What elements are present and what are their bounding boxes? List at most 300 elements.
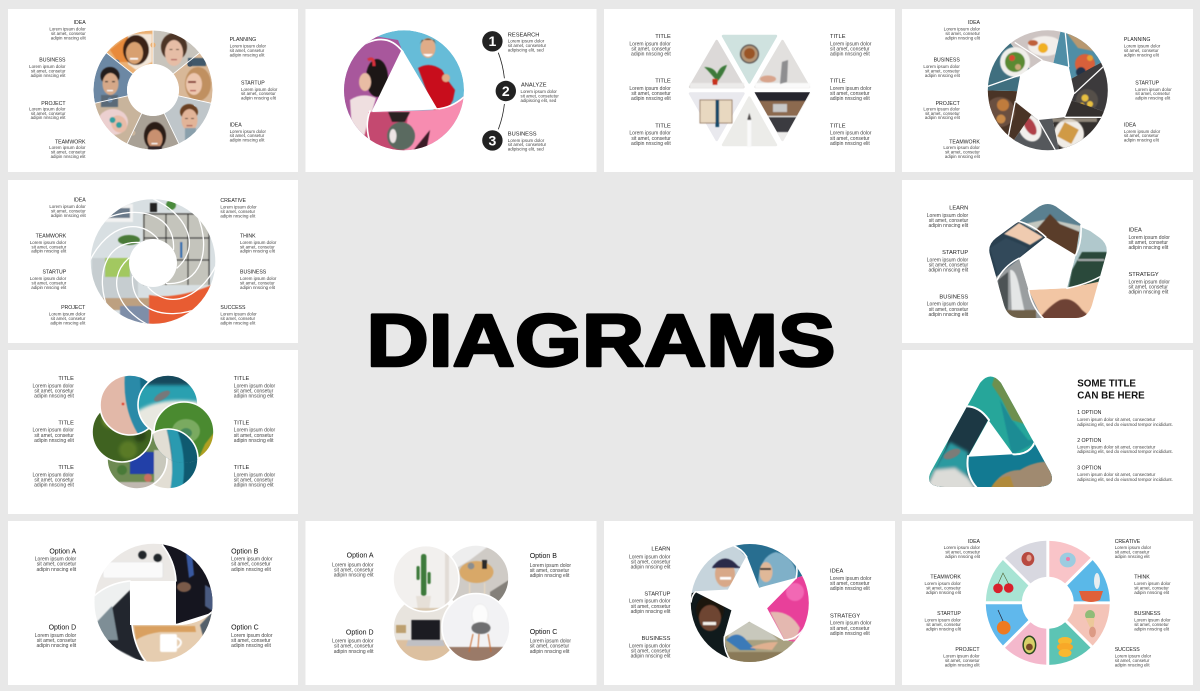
label: TEAMWORK: sit amet, consetur xyxy=(51,150,86,155)
label: TITLE middle right: sit amet, consetur xyxy=(830,91,870,97)
inner opening xyxy=(129,239,177,287)
label: PROJECT: Lorem ipsum dolor xyxy=(923,106,960,111)
title: DIAGRAMS xyxy=(366,299,836,382)
label: IDEA: Lorem ipsum dolor xyxy=(1128,235,1170,241)
label: STRATEGY: STRATEGY xyxy=(830,613,860,619)
label: Option C: Option C xyxy=(530,629,557,636)
label: TITLE bottom right: TITLE xyxy=(234,465,249,471)
panel background xyxy=(604,9,895,172)
label: IDEA: Lorem ipsum dolor xyxy=(944,545,981,550)
room photo xyxy=(90,198,216,326)
blade separators xyxy=(997,221,1103,320)
label: THINK: Lorem ipsum dolor xyxy=(240,240,277,245)
label: CREATIVE: Lorem ipsum dolor xyxy=(1115,545,1152,550)
segment: ice cream cone xyxy=(1067,604,1110,646)
blade: pan with vegetables xyxy=(1071,62,1108,112)
label: Option D: Option D xyxy=(49,625,76,632)
panel background xyxy=(306,9,596,172)
label: CREATIVE: CREATIVE xyxy=(220,198,246,204)
label: Option A: adipin nnscing elit xyxy=(334,572,374,578)
swirl photo circle xyxy=(90,199,216,324)
label: Option B: sit amet, consetur xyxy=(231,562,271,568)
label: PROJECT: Lorem ipsum dolor xyxy=(29,106,66,111)
panel: four interior circles xyxy=(306,521,596,685)
panel background xyxy=(902,180,1193,343)
step 1 badge: 1 xyxy=(489,33,497,49)
label: TEAMWORK: Lorem ipsum dolor xyxy=(49,145,86,150)
label: Option B: Lorem ipsum dolor xyxy=(231,557,273,563)
label: TEAMWORK: sit amet, consetur xyxy=(32,244,67,249)
blade: dusk lake xyxy=(984,222,1046,277)
label: SUCCESS: sit amet, consetur xyxy=(220,316,256,321)
label: IDEA: sit amet, consetur xyxy=(945,550,981,555)
step 1 badge xyxy=(482,31,503,52)
label: Option D: adipin nnscing elit xyxy=(36,643,77,649)
label: PLANNING: sit amet, consetur xyxy=(230,48,265,53)
label: BUSINESS: sit amet, consetur xyxy=(929,307,969,313)
label: ANALYZE: ANALYZE xyxy=(521,83,547,89)
quadrant: dark suit xyxy=(161,540,214,624)
circle photo with square opening xyxy=(90,540,214,670)
label: STARTUP: STARTUP xyxy=(42,270,67,276)
label: IDEA right: adipin nnscing elit xyxy=(1124,138,1160,143)
label: LEARN: sit amet, consetur xyxy=(631,559,671,565)
label: BUSINESS: adipiscing elit, sed xyxy=(508,147,544,152)
panel: aerial pinwheel xyxy=(8,350,298,514)
circle: cactus xyxy=(390,544,462,614)
label: BUSINESS: BUSINESS xyxy=(508,132,537,138)
blade: coastal road xyxy=(1067,227,1107,288)
label: TITLE bottom right: adipin nnscing elit xyxy=(830,141,870,147)
label: TITLE top right: sit amet, consetur xyxy=(234,388,274,394)
label: IDEA: IDEA xyxy=(830,569,843,575)
four overlapping circles xyxy=(390,543,512,666)
donut: seven portrait puzzle pieces xyxy=(94,30,212,150)
label: STRATEGY: sit amet, consetur xyxy=(1128,284,1168,290)
piece: man left xyxy=(94,53,132,108)
segment separators xyxy=(960,406,1037,489)
label: IDEA: sit amet, consetur xyxy=(51,31,86,36)
label: PROJECT: sit amet, consetur xyxy=(925,111,960,116)
label: TEAMWORK: TEAMWORK xyxy=(930,575,961,581)
puzzle tabs xyxy=(107,42,199,136)
panel background xyxy=(8,180,298,343)
label: IDEA: IDEA xyxy=(968,539,981,545)
petal: green park xyxy=(152,400,216,464)
label: TITLE top right: Lorem ipsum dolor xyxy=(830,42,872,48)
label: IDEA: IDEA xyxy=(968,20,981,26)
label: LEARN: LEARN xyxy=(651,547,670,553)
label: THINK: adipin nnscing elit xyxy=(1134,590,1170,595)
quadrant separators xyxy=(93,543,214,664)
label: TITLE middle right: TITLE xyxy=(234,420,249,426)
label: TITLE middle left: adipin nnscing elit xyxy=(34,438,75,444)
label: LEARN: LEARN xyxy=(949,205,968,211)
heading: SOME TITLE xyxy=(1077,378,1136,390)
option 1: 1 OPTION xyxy=(1077,410,1102,416)
label: TITLE top left: Lorem ipsum dolor xyxy=(32,383,74,389)
label: TEAMWORK: adipin nnscing elit xyxy=(31,249,67,254)
label: TEAMWORK: Lorem ipsum dolor xyxy=(943,145,980,150)
label: PROJECT: Lorem ipsum dolor xyxy=(49,312,86,316)
label: RESEARCH: sit amet, consetetur xyxy=(508,43,547,48)
petal: forest xyxy=(90,400,154,464)
label: IDEA right: IDEA xyxy=(1124,122,1137,128)
label: LEARN: adipin nnscing elit xyxy=(928,223,969,229)
label: STARTUP: Lorem ipsum dolor xyxy=(925,618,961,622)
piece: man lower right xyxy=(164,96,211,144)
petal: boat on shore xyxy=(136,373,200,437)
step 2 badge xyxy=(496,81,516,101)
segment: plate with lollipop xyxy=(1049,541,1091,583)
label: THINK: sit amet, consetur xyxy=(240,244,275,249)
wheel of eight segments xyxy=(974,529,1122,677)
quadrant: coffee mug on wood xyxy=(132,610,214,670)
label: THINK: THINK xyxy=(240,233,256,239)
panel: office aperture A-D xyxy=(8,521,298,685)
segment: dark sea and turtle rock xyxy=(925,406,988,490)
label: STARTUP: STARTUP xyxy=(241,80,265,86)
label: RESEARCH: Lorem ipsum dolor xyxy=(508,38,545,44)
label: CREATIVE: CREATIVE xyxy=(1115,539,1141,545)
blade: woman in blue hood xyxy=(730,540,815,603)
panel: three-step triangle aperture xyxy=(306,9,596,172)
label: BUSINESS: Lorem ipsum dolor xyxy=(29,64,66,69)
label: Option A: sit amet, consetur xyxy=(334,567,374,573)
panel: hexagon of triangles xyxy=(604,9,895,172)
label: TITLE top left: Lorem ipsum dolor xyxy=(629,42,671,48)
label: IDEA: adipin nnscing elit xyxy=(945,35,981,40)
blade: waterfall xyxy=(996,258,1044,322)
label: STRATEGY: Lorem ipsum dolor xyxy=(1128,279,1170,285)
option 3: adipiscing elit, sed do eiusmod tempor incididunt. xyxy=(1077,477,1173,482)
white triangle centre xyxy=(968,420,1013,457)
label: PROJECT: adipin nnscing elit xyxy=(925,115,961,120)
label: CREATIVE: sit amet, consetur xyxy=(220,209,256,214)
label: IDEA: sit amet, consetur xyxy=(830,581,870,587)
label: TITLE top left: adipin nnscing elit xyxy=(34,394,75,400)
label: SUCCESS: adipin nnscing elit xyxy=(1115,662,1150,667)
label: PLANNING: Lorem ipsum dolor xyxy=(1124,44,1161,48)
blade: man in cap xyxy=(680,540,749,603)
label: Option C: Option C xyxy=(231,625,259,632)
label: TITLE middle left: sit amet, consetur xyxy=(631,91,671,97)
label: TEAMWORK: TEAMWORK xyxy=(36,233,67,239)
label: BUSINESS: adipin nnscing elit xyxy=(928,312,969,318)
label: PROJECT: sit amet, consetur xyxy=(51,316,86,321)
segment: cured meat xyxy=(1005,529,1064,588)
label: TEAMWORK: TEAMWORK xyxy=(55,139,86,145)
label: PLANNING: PLANNING xyxy=(230,37,256,43)
label: SUCCESS: SUCCESS xyxy=(220,305,246,311)
label: IDEA: sit amet, consetur xyxy=(51,209,86,214)
label: BUSINESS: BUSINESS xyxy=(240,270,267,276)
label: PROJECT: sit amet, consetur xyxy=(31,111,66,116)
label: Option D: adipin nnscing elit xyxy=(334,649,374,655)
panel background xyxy=(902,521,1193,685)
label: TITLE bottom right: Lorem ipsum dolor xyxy=(234,472,276,478)
label: BUSINESS: BUSINESS xyxy=(39,58,66,64)
label: THINK: THINK xyxy=(1134,575,1150,581)
label: Option A: Option A xyxy=(347,552,374,559)
label: TITLE middle right: sit amet, consetur xyxy=(234,433,274,439)
label: Option B: sit amet, consetur xyxy=(530,568,569,574)
label: RESEARCH: adipiscing elit, sed xyxy=(508,47,544,52)
label: TITLE top left: sit amet, consetur xyxy=(631,47,671,53)
panel: puzzle portraits donut xyxy=(8,9,298,172)
label: CREATIVE: Lorem ipsum dolor xyxy=(220,204,257,210)
label: PLANNING: adipin nnscing elit xyxy=(1124,52,1160,57)
blade: mountain peak xyxy=(1020,204,1081,254)
label: PROJECT: PROJECT xyxy=(955,647,980,653)
label: PLANNING: PLANNING xyxy=(1124,37,1150,43)
label: CREATIVE: adipin nnscing elit xyxy=(1115,554,1150,559)
label: IDEA: adipin nnscing elit xyxy=(830,586,870,592)
label: CREATIVE: adipin nnscing elit xyxy=(220,213,256,218)
label: CREATIVE: sit amet, consetur xyxy=(1115,550,1150,555)
label: LEARN: adipin nnscing elit xyxy=(631,564,671,570)
label: TEAMWORK: sit amet, consetur xyxy=(926,586,961,591)
blade: smiling man xyxy=(680,592,749,670)
label: ANALYZE: adipiscing elit, sed xyxy=(520,98,557,103)
label: IDEA: adipin nnscing elit xyxy=(1128,245,1169,251)
quadrant: glass tower xyxy=(90,581,147,665)
aperture centre xyxy=(1015,60,1075,120)
label: IDEA: Lorem ipsum dolor xyxy=(830,576,872,582)
label: IDEA: adipin nnscing elit xyxy=(51,213,86,218)
label: TITLE middle right: adipin nnscing elit xyxy=(234,438,274,444)
blade: waffle plate xyxy=(1052,100,1104,150)
label: TEAMWORK: TEAMWORK xyxy=(949,139,980,145)
label: IDEA right: sit amet, consetur xyxy=(230,133,265,138)
label: Option B: Option B xyxy=(231,549,259,556)
panel background xyxy=(8,9,298,172)
label: STARTUP: sit amet, consetur xyxy=(929,262,969,268)
label: STARTUP: STARTUP xyxy=(1135,80,1160,86)
label: SUCCESS: Lorem ipsum dolor xyxy=(1115,654,1152,658)
label: BUSINESS: sit amet, consetetur xyxy=(508,142,547,147)
petal: surf xyxy=(136,427,200,491)
segment: steaming pot xyxy=(1063,560,1122,619)
label: IDEA: sit amet, consetur xyxy=(945,31,981,36)
blade: holding hands xyxy=(724,603,810,670)
blade separators xyxy=(691,545,806,661)
label: STARTUP: adipin nnscing elit xyxy=(241,96,277,101)
label: BUSINESS: Lorem ipsum dolor xyxy=(927,302,969,308)
label: Option B: adipin nnscing elit xyxy=(530,573,570,579)
panel background xyxy=(604,521,895,685)
label: TITLE top right: adipin nnscing elit xyxy=(234,394,274,400)
label: LEARN: Lorem ipsum dolor xyxy=(927,213,969,219)
label: STARTUP: adipin nnscing elit xyxy=(31,285,67,290)
piece: woman top xyxy=(153,30,200,74)
label: STARTUP: sit amet, consetur xyxy=(631,604,671,610)
label: TITLE middle right: adipin nnscing elit xyxy=(830,96,870,102)
label: Option C: sit amet, consetur xyxy=(231,638,271,644)
label: STARTUP: sit amet, consetur xyxy=(32,281,67,286)
segment: avocado xyxy=(1005,622,1046,665)
label: STRATEGY: STRATEGY xyxy=(1128,272,1159,278)
label: TITLE middle left: Lorem ipsum dolor xyxy=(629,86,671,92)
label: IDEA: IDEA xyxy=(74,198,86,204)
label: TITLE top right: TITLE xyxy=(234,376,249,382)
label: TITLE middle right: TITLE xyxy=(830,79,846,85)
label: Option C: Lorem ipsum dolor xyxy=(231,633,273,639)
label: BUSINESS: BUSINESS xyxy=(642,636,671,642)
segment: head from above on pink xyxy=(364,96,464,150)
panel background xyxy=(902,350,1193,514)
label: SUCCESS: SUCCESS xyxy=(1115,647,1140,653)
label: PLANNING: adipin nnscing elit xyxy=(230,52,265,57)
segment: orange xyxy=(974,586,1033,646)
pentagon opening xyxy=(1019,237,1076,290)
label: STARTUP: adipin nnscing elit xyxy=(631,609,671,615)
quadrant: keyboard and sunglasses xyxy=(90,540,180,600)
label: PROJECT: adipin nnscing elit xyxy=(50,320,86,325)
label: Option A: sit amet, consetur xyxy=(37,562,77,568)
label: PROJECT: adipin nnscing elit xyxy=(945,662,980,667)
label: PROJECT: PROJECT xyxy=(41,101,66,107)
panel: food aperture xyxy=(902,9,1193,172)
triangle: open book xyxy=(690,94,744,140)
label: Option B: Lorem ipsum dolor xyxy=(530,563,571,569)
pentagon of landscapes xyxy=(989,204,1107,318)
label: BUSINESS: adipin nnscing elit xyxy=(925,73,961,78)
blade: salad bowl xyxy=(988,43,1030,92)
blade: croissants xyxy=(988,90,1032,140)
label: Option C: adipin nnscing elit xyxy=(231,643,271,649)
label: THINK: Lorem ipsum dolor xyxy=(1134,581,1171,586)
label: STARTUP: adipin nnscing elit xyxy=(926,626,962,631)
label: STARTUP: sit amet, consetur xyxy=(1135,91,1170,96)
label: TITLE bottom left: sit amet, consetur xyxy=(34,477,74,483)
label: STARTUP: STARTUP xyxy=(937,611,961,617)
label: SUCCESS: Lorem ipsum dolor xyxy=(220,312,257,316)
label: BUSINESS: adipin nnscing elit xyxy=(240,285,276,290)
panel: coastal triangle xyxy=(902,350,1193,514)
piece: woman bottom xyxy=(128,114,178,150)
step 2 badge: 2 xyxy=(502,83,510,99)
label: TITLE bottom left: sit amet, consetur xyxy=(631,136,671,142)
piece: woman with sunglasses xyxy=(95,96,142,144)
blade: berries bowl xyxy=(1054,32,1101,79)
option 1: adipiscing elit, sed do eiusmod tempor incididunt. xyxy=(1077,422,1173,427)
label: TITLE middle left: TITLE xyxy=(58,420,74,426)
segment: citrus slices xyxy=(1031,618,1091,677)
label: BUSINESS: Lorem ipsum dolor xyxy=(240,276,277,281)
rounded triangle of coast photos xyxy=(925,370,1060,490)
label: PLANNING: Lorem ipsum dolor xyxy=(230,44,266,48)
label: TITLE top left: sit amet, consetur xyxy=(34,388,74,394)
label: TEAMWORK: sit amet, consetur xyxy=(945,150,980,155)
label: LEARN: Lorem ipsum dolor xyxy=(629,554,671,560)
option 2: 2 OPTION xyxy=(1077,438,1102,444)
label: BUSINESS: Lorem ipsum dolor xyxy=(923,64,960,69)
label: TITLE bottom right: TITLE xyxy=(830,123,846,129)
blade: desert hill xyxy=(1029,280,1108,325)
label: TITLE bottom left: adipin nnscing elit xyxy=(631,141,671,147)
blade: pink powder hands xyxy=(749,572,815,642)
label: STARTUP: Lorem ipsum dolor xyxy=(30,276,67,281)
label: BUSINESS: BUSINESS xyxy=(939,294,968,300)
piece: woman top left xyxy=(106,30,153,74)
label: BUSINESS: Lorem ipsum dolor xyxy=(508,138,545,143)
label: BUSINESS: BUSINESS xyxy=(934,58,960,64)
step 3 badge xyxy=(482,130,503,151)
label: THINK: sit amet, consetur xyxy=(1134,586,1169,591)
label: BUSINESS: sit amet, consetur xyxy=(1134,622,1169,627)
label: SUCCESS: adipin nnscing elit xyxy=(220,320,256,325)
label: Option A: Lorem ipsum dolor xyxy=(35,557,77,563)
label: Option B: adipin nnscing elit xyxy=(231,567,271,573)
label: TEAMWORK: adipin nnscing elit xyxy=(926,590,962,595)
label: TITLE bottom left: Lorem ipsum dolor xyxy=(32,472,74,478)
panel background xyxy=(8,521,298,685)
label: TITLE top right: sit amet, consetur xyxy=(830,47,870,53)
star opening xyxy=(696,557,796,640)
label: STARTUP: Lorem ipsum dolor xyxy=(629,599,671,605)
label: Option D: Lorem ipsum dolor xyxy=(35,633,77,639)
label: STARTUP: sit amet, consetur xyxy=(241,91,276,96)
label: ANALYZE: Lorem ipsum dolor xyxy=(520,89,557,94)
label: PROJECT: adipin nnscing elit xyxy=(31,115,66,120)
segment: woman with red headphones xyxy=(344,36,402,136)
label: Option C: sit amet, consetur xyxy=(530,644,569,650)
label: TITLE bottom right: Lorem ipsum dolor xyxy=(830,131,872,137)
label: TITLE bottom left: TITLE xyxy=(58,465,74,471)
label: BUSINESS: BUSINESS xyxy=(1134,611,1161,617)
label: TITLE bottom left: Lorem ipsum dolor xyxy=(629,131,671,137)
label: TITLE middle right: Lorem ipsum dolor xyxy=(830,86,872,92)
piece separators xyxy=(95,30,211,144)
label: TEAMWORK: Lorem ipsum dolor xyxy=(30,240,67,245)
pinwheel of aerial photos xyxy=(90,373,216,491)
label: PROJECT: sit amet, consetur xyxy=(945,658,980,663)
label: IDEA right: adipin nnscing elit xyxy=(230,138,265,143)
circle: chair xyxy=(440,592,512,663)
label: TITLE top right: adipin nnscing elit xyxy=(830,52,870,58)
blade: eggs plate xyxy=(1010,30,1060,68)
label: TITLE top left: adipin nnscing elit xyxy=(631,52,671,58)
label: PROJECT: PROJECT xyxy=(936,101,961,107)
segment: top coastline xyxy=(925,370,1055,490)
label: IDEA right: Lorem ipsum dolor xyxy=(230,129,266,134)
label: STARTUP: adipin nnscing elit xyxy=(928,268,969,274)
spiral blades xyxy=(90,199,215,324)
label: TITLE middle left: TITLE xyxy=(655,79,671,85)
label: Option A: adipin nnscing elit xyxy=(36,567,77,573)
label: STRATEGY: sit amet, consetur xyxy=(830,626,870,632)
step connector arcs xyxy=(498,53,504,129)
option 2: Lorem ipsum dolor sit amet, consectetur xyxy=(1077,444,1156,450)
label: IDEA: Lorem ipsum dolor xyxy=(49,204,86,209)
label: IDEA: IDEA xyxy=(1128,228,1142,234)
label: STRATEGY: adipin nnscing elit xyxy=(1128,290,1169,296)
panel: interior swirl xyxy=(8,180,298,343)
label: Option D: sit amet, consetur xyxy=(37,638,77,644)
segment: cherries xyxy=(986,560,1028,601)
segment: man in red sweater xyxy=(344,30,464,150)
triangle: desk from above xyxy=(754,92,810,142)
label: TITLE bottom right: sit amet, consetur xyxy=(234,477,274,483)
label: Option B: Option B xyxy=(530,553,557,560)
panel: landscape pentagon xyxy=(902,180,1193,343)
label: BUSINESS: sit amet, consetur xyxy=(631,648,671,654)
label: IDEA: adipin nnscing elit xyxy=(945,554,981,559)
panel background xyxy=(306,521,596,685)
petal: beach xyxy=(98,373,162,437)
circle: laptop on desk xyxy=(390,594,462,666)
